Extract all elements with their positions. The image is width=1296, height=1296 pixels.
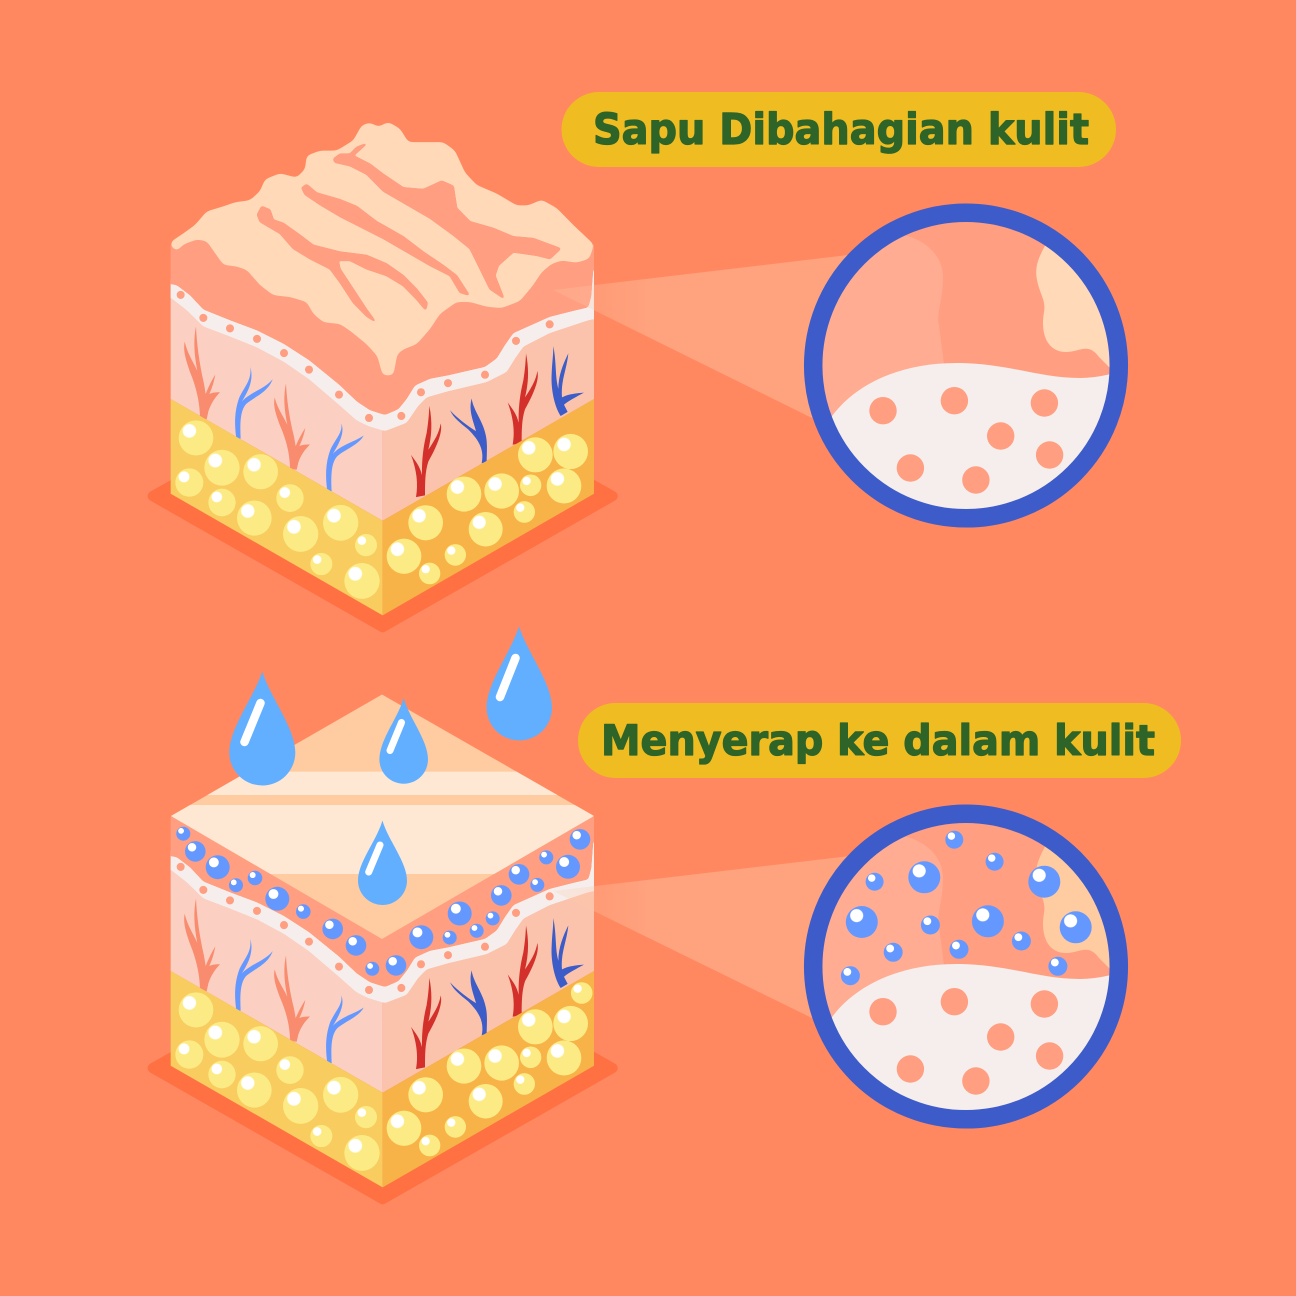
- skin block 2: absorbing serum: [153, 690, 613, 1199]
- lens cream surface: [1036, 246, 1110, 368]
- smooth top surface: [165, 690, 600, 945]
- heading text: Menyerap ke dalam kulit: [601, 716, 1155, 765]
- wrinkle creases: [257, 143, 561, 322]
- lens dots: [869, 988, 1063, 1095]
- top light band lower: [165, 805, 600, 874]
- water drop small centre: [379, 698, 428, 784]
- heading pill 2: [578, 703, 1181, 778]
- zoom beam 2: [553, 856, 850, 1018]
- lens lighter epidermis: [822, 236, 944, 416]
- band dots: [177, 291, 554, 422]
- top base: [165, 690, 600, 945]
- lens lighter epidermis: [822, 836, 944, 1018]
- white wavy band: [160, 269, 607, 431]
- skin block 1 lower layers: [153, 144, 613, 627]
- lens mid epidermis: [906, 823, 1110, 979]
- blue ring: [813, 213, 1119, 518]
- fat cells: [175, 420, 588, 599]
- magnified hydrated skin: [822, 823, 1110, 1110]
- absorbed serum bubbles: [176, 827, 590, 976]
- dry wrinkled surface: [171, 122, 594, 375]
- zoom beam 1: [553, 255, 848, 418]
- magnifier circle 1: [813, 213, 1120, 520]
- ground shadow: [153, 367, 613, 627]
- lens dots: [869, 387, 1063, 494]
- lens serum bubbles: [841, 831, 1092, 985]
- salmon veins: [184, 326, 310, 470]
- magnified skin layers: [822, 222, 1110, 509]
- epidermis layer: [160, 144, 605, 423]
- pill background: [562, 92, 1116, 167]
- fat layer right face: [383, 399, 594, 615]
- light blue veins: [235, 367, 364, 491]
- heading pill 1: [562, 92, 1116, 167]
- cream surface: [171, 122, 594, 375]
- lens mid epidermis: [906, 222, 1110, 378]
- dermis right face: [383, 279, 594, 521]
- water drop on surface: [358, 820, 407, 905]
- fat layer left face: [171, 399, 383, 615]
- dermis left face: [171, 279, 383, 521]
- lens white tissue: [832, 363, 1110, 509]
- lens cream surface: [1036, 846, 1110, 968]
- water drop large right: [487, 626, 552, 740]
- pill background: [578, 703, 1181, 778]
- heading text: Sapu Dibahagian kulit: [593, 105, 1089, 155]
- dark blue veins: [450, 346, 584, 463]
- water drop large left: [229, 672, 295, 785]
- skin block 2 lower layers: [153, 716, 613, 1199]
- epidermis and dermal band: [160, 144, 607, 431]
- magnifier circle 2: [813, 814, 1120, 1121]
- lens white tissue: [832, 964, 1110, 1110]
- blue ring: [813, 814, 1119, 1119]
- skin block 1: dry skin: [153, 122, 613, 627]
- top light band upper: [208, 772, 558, 795]
- red veins: [411, 353, 538, 497]
- extra fat cell: [571, 982, 592, 1004]
